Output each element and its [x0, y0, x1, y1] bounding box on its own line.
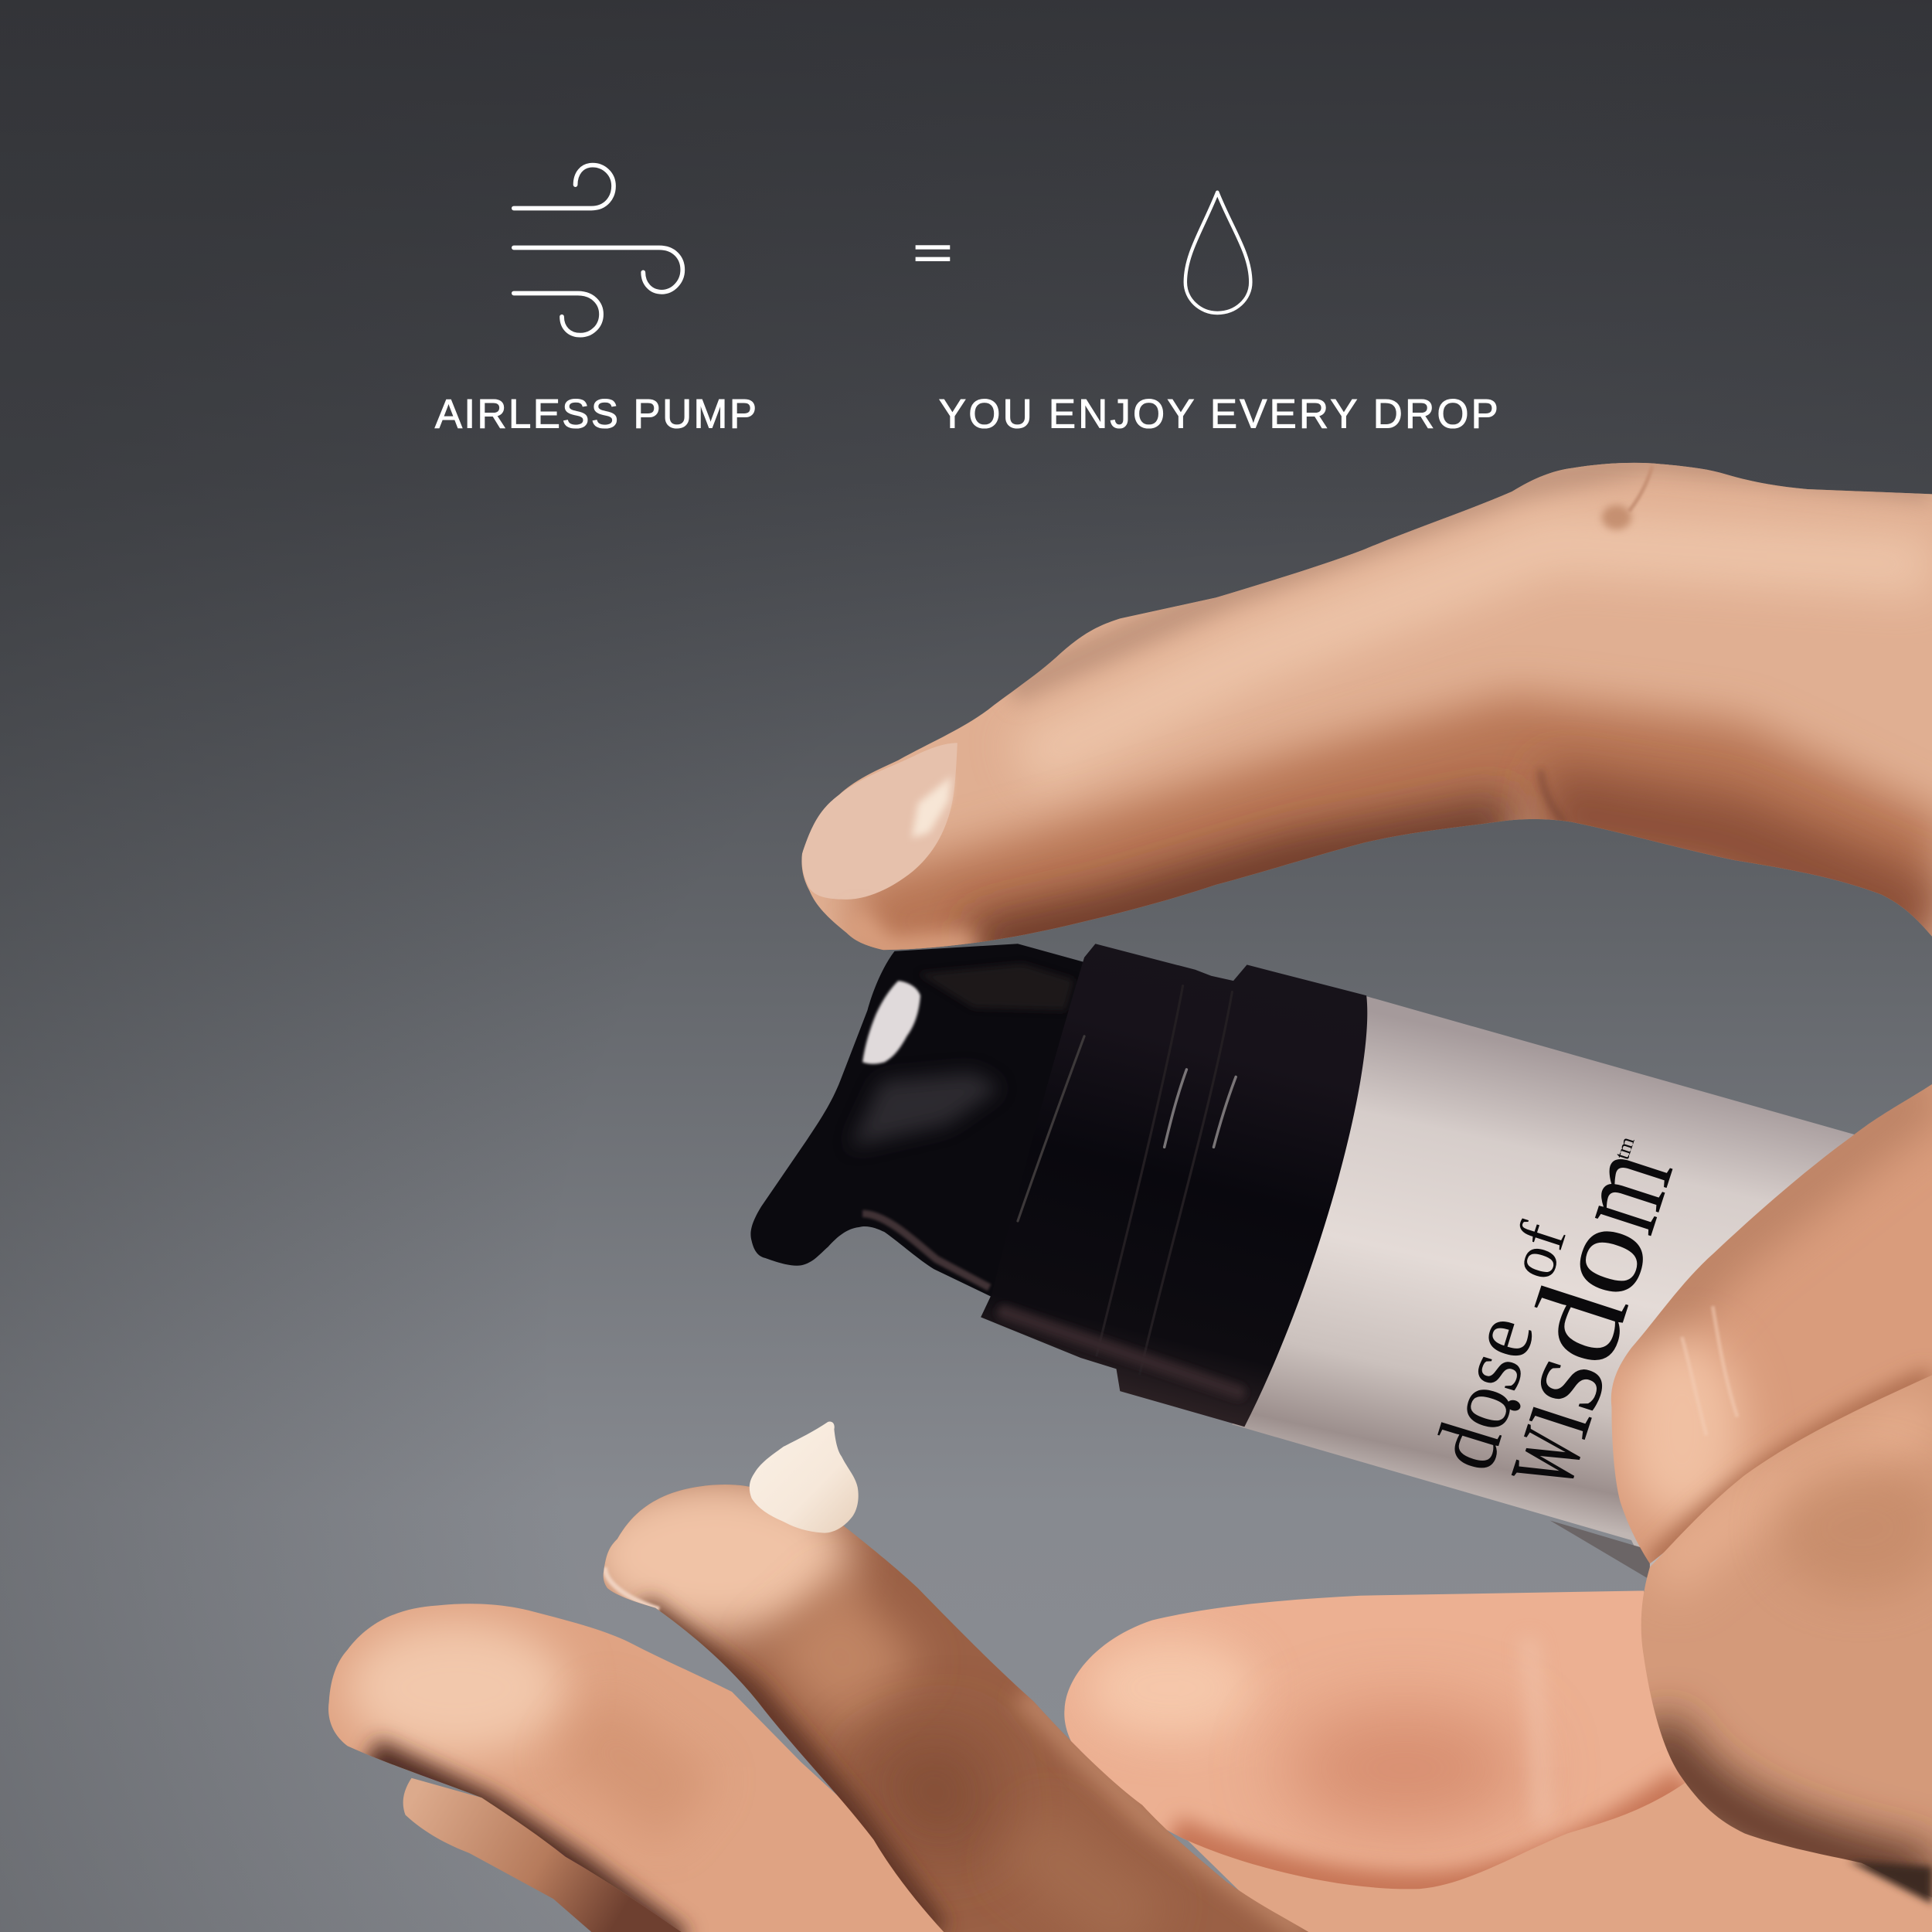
lower phalanx tone: [1022, 1836, 1146, 1932]
middle knuckle dark: [850, 1725, 998, 1861]
label: you enjoy every drop: YOU ENJOY EVERY DROP: [939, 391, 1498, 437]
fingertip tone: [850, 918, 974, 951]
fingertip light: [345, 1621, 566, 1756]
mid tone: [801, 1614, 881, 1700]
brand trademark: tm: [1610, 1134, 1639, 1162]
joint crease: [1528, 1639, 1543, 1824]
hand: thumb segment upper: [1602, 1078, 1932, 1571]
fingertip light: [579, 1475, 850, 1635]
fingertip light: [1621, 1337, 1743, 1522]
knuckle mark: [1602, 505, 1631, 530]
brown mid tone: [1774, 1460, 1932, 1596]
bright back of finger: [1022, 543, 1932, 764]
bottle collar: [981, 944, 1367, 1427]
icon: water drop: [1185, 192, 1250, 313]
nozzle grey reflection: [850, 1072, 1001, 1147]
right side dark shade: [1540, 807, 1932, 924]
hand: left finger: [321, 1596, 1010, 1932]
bottle: [750, 944, 1872, 1627]
lower knuckle crease: [1540, 770, 1565, 823]
lower shade: [1171, 1787, 1688, 1893]
nozzle lower lip sheen: [862, 1213, 989, 1287]
lower dark shade: [369, 1756, 678, 1932]
collar highlights: [1004, 986, 1238, 1393]
icon: equals sign: [916, 245, 950, 261]
underside dark shade: [974, 819, 1515, 949]
hand: upper finger: [788, 456, 1932, 961]
bottle base strip: [1550, 1520, 1650, 1580]
icon: wind: [514, 165, 682, 335]
brand word: wisdom: wisdom: [1458, 1132, 1699, 1502]
hand: middle finger: [1053, 1583, 1706, 1897]
tip light: [1657, 1417, 1932, 1577]
brand word: dose: dose: [1415, 1304, 1554, 1481]
skin creases: [1682, 1306, 1737, 1435]
brand word: of: of: [1495, 1214, 1580, 1287]
underside mid shade: [862, 752, 1932, 937]
crease shade: [1651, 1378, 1932, 1567]
hand: thumb segment lower: [1633, 1368, 1932, 1903]
bottle nozzle: [750, 944, 1103, 1300]
palm corner shadow: [1849, 1861, 1932, 1903]
nail highlight: [912, 776, 951, 838]
nozzle top sheen: [918, 964, 1074, 1010]
bottle body: [1232, 993, 1872, 1627]
hand: pointing finger under cream: [579, 1475, 1325, 1932]
lower dark shade: [1651, 1725, 1932, 1879]
cream dollop: [750, 1422, 859, 1533]
left edge shadow: [641, 1608, 937, 1932]
brand wordmark: [1415, 1132, 1699, 1502]
blush: [1281, 1706, 1528, 1830]
fingernail edge: [605, 1567, 659, 1609]
fingernail: [802, 743, 957, 900]
hand: lowest finger: [403, 1778, 690, 1932]
right edge light: [1022, 1694, 1306, 1932]
hand: palm: [1171, 1725, 1932, 1932]
knuckle crease: [1629, 466, 1652, 512]
nozzle highlight: [862, 981, 920, 1064]
label: airless pump: AIRLESS PUMP: [435, 391, 757, 437]
fingertip glow: [1084, 1636, 1257, 1740]
top edge tone: [1627, 1084, 1932, 1349]
upper edge shade: [1010, 456, 1932, 690]
finger mid tone: [579, 1725, 690, 1811]
